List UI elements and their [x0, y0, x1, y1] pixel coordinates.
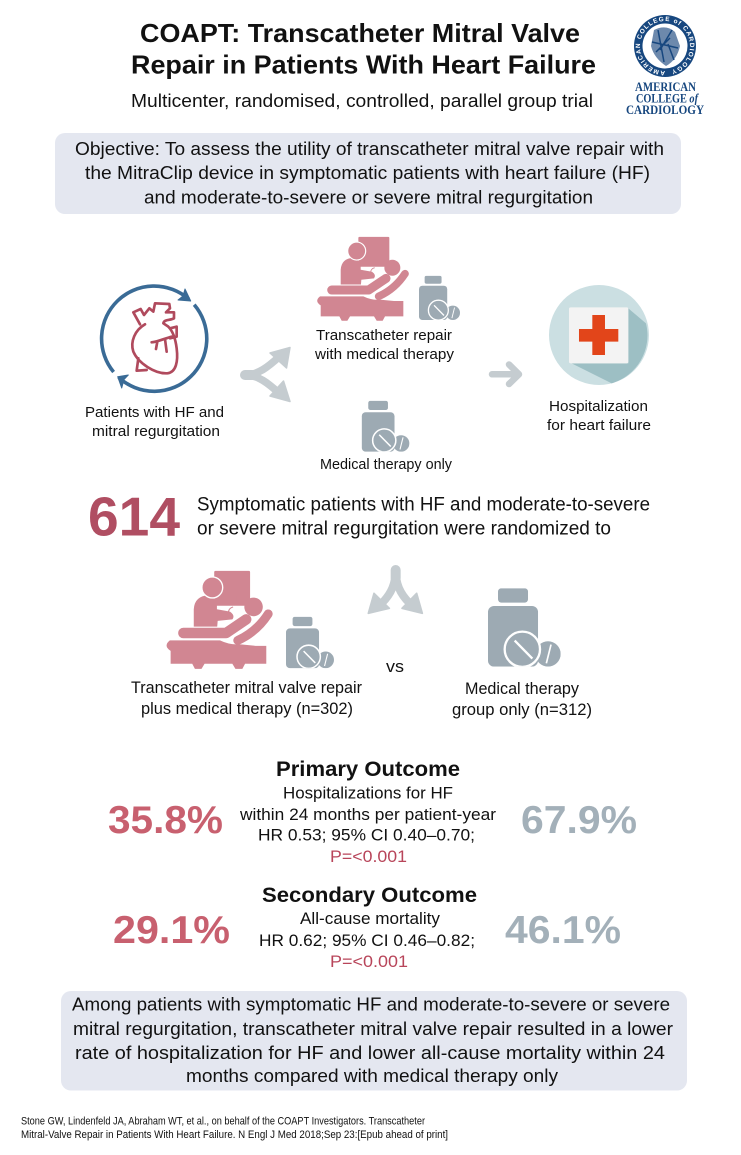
title: Repair in Patients With Heart Failure [131, 50, 596, 80]
label: hospitalization [547, 398, 651, 434]
label: medical arm: Medical therapy [465, 680, 580, 698]
label: transcatheter repair [314, 327, 455, 363]
title: COAPT: Transcatheter Mitral Valve [140, 18, 580, 48]
primary outcome details: HR 0.53; 95% CI 0.40–0.70; [258, 826, 475, 844]
primary outcome details: P=<0.001 [330, 848, 407, 866]
secondary outcome details: HR 0.62; 95% CI 0.46–0.82; [259, 932, 475, 950]
stat: device arm secondary: 29.1% [113, 909, 230, 952]
primary outcome details: within 24 months per patient-year [239, 806, 497, 824]
secondary outcome details: All-cause mortality [300, 910, 441, 928]
label: vs: vs [386, 658, 404, 676]
heading: secondary outcome: Secondary Outcome [262, 884, 477, 907]
citation [21, 1116, 448, 1141]
logo: American College of Cardiology: CARDIOLOGY [626, 102, 705, 117]
randomization text [197, 494, 650, 540]
arrow: to outcome [492, 364, 519, 384]
citation: Stone GW, Lindenfeld JA, Abraham WT, et al., on behalf of the COAPT Investigators. Transcatheter [21, 1116, 425, 1128]
label: device arm [131, 679, 362, 718]
logo: American College of Cardiology: AMERICAN COLLEGE of CARDIOLOGY [636, 16, 694, 76]
panel: objective: the MitraClip device in symptomatic patients with heart failure (HF) [85, 163, 650, 183]
icon: pill bottle medical therapy [362, 401, 409, 452]
secondary outcome details [259, 910, 475, 971]
arrow: split to two arms [245, 348, 290, 402]
panel: secondary outcome [113, 884, 621, 971]
label: medical arm: group only (n=312) [452, 701, 592, 719]
label: hospitalization: for heart failure [547, 417, 651, 434]
subtitle: Multicenter, randomised, controlled, parallel group trial [131, 91, 593, 111]
big number 614: 614 [88, 486, 180, 548]
label: patients: mitral regurgitation [92, 423, 220, 440]
randomization text: Symptomatic patients with HF and moderate-to-severe [197, 494, 650, 516]
label: patients: Patients with HF and [85, 404, 224, 421]
primary outcome details [239, 784, 497, 866]
heading: primary outcome: Primary Outcome [276, 758, 460, 781]
title [131, 18, 596, 80]
panel: conclusion: months compared with medical therapy only [186, 1065, 559, 1086]
icon: transcatheter repair scene [317, 237, 405, 321]
label: transcatheter repair: Transcatheter repair [316, 327, 452, 344]
citation: Mitral-Valve Repair in Patients With Heart Failure. N Engl J Med 2018;Sep 23:[Epub ahead of print] [21, 1129, 448, 1141]
icon: pill bottle device arm [286, 617, 334, 668]
icon: pill bottle small [419, 276, 460, 320]
label: device arm: Transcatheter mitral valve repair [131, 679, 362, 697]
panel: objective: and moderate-to-severe or severe mitral regurgitation [144, 188, 593, 208]
panel: conclusion [61, 991, 687, 1090]
icon: pill bottle large [488, 588, 561, 667]
panel: conclusion: Among patients with symptomatic HF and moderate-to-severe or severe [72, 994, 670, 1014]
label: medical arm [452, 680, 592, 719]
logo: American College of Cardiology [626, 15, 705, 117]
logo: American College of Cardiology: AMERICAN [635, 79, 697, 94]
stat: medical arm primary: 67.9% [521, 799, 637, 842]
label: hospitalization: Hospitalization [549, 398, 648, 415]
label: device arm: plus medical therapy (n=302) [141, 700, 353, 718]
panel: conclusion: mitral regurgitation, transcatheter mitral valve repair resulted in a lower [73, 1018, 673, 1039]
label: patients [85, 404, 224, 440]
panel: objective [55, 133, 681, 214]
panel: objective: Objective: To assess the utility of transcatheter mitral valve repair with [75, 139, 664, 159]
label: medical therapy only: Medical therapy only [320, 456, 452, 473]
label: transcatheter repair: with medical therapy [314, 346, 455, 363]
panel: primary outcome [108, 758, 637, 866]
stat: device arm primary: 35.8% [108, 799, 223, 842]
stat: medical arm secondary: 46.1% [505, 909, 621, 952]
secondary outcome details: P=<0.001 [330, 953, 408, 971]
randomization text: or severe mitral regurgitation were randomized to [197, 518, 611, 540]
icon: transcatheter repair scene large [167, 571, 268, 669]
icon: hospitalization first aid [549, 285, 649, 385]
logo: American College of Cardiology: COLLEGE of [636, 90, 699, 106]
icon: heart with circular arrows [102, 286, 207, 391]
arrow: randomization split [368, 570, 422, 613]
primary outcome details: Hospitalizations for HF [283, 784, 453, 802]
panel: conclusion: rate of hospitalization for HF and lower all-cause mortality within 24 [75, 1042, 665, 1063]
